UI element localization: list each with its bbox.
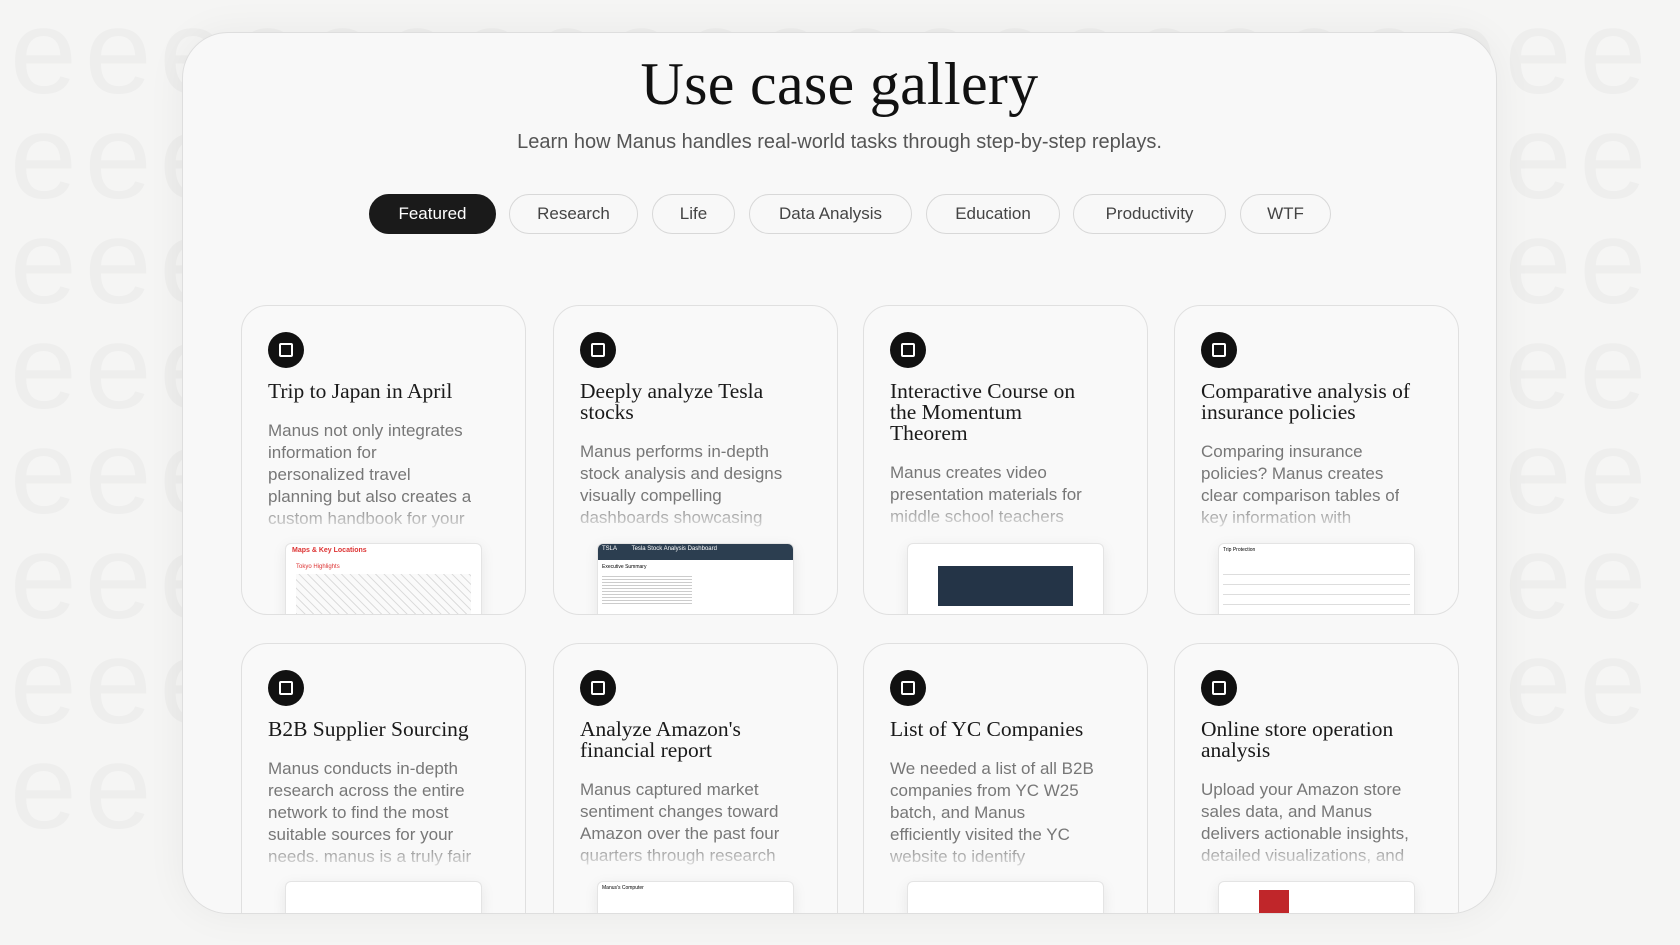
card description: visually compelling: [580, 486, 722, 505]
tab: Education: [926, 194, 1060, 234]
icon: book: [268, 332, 304, 368]
card description: stock analysis and designs: [580, 464, 782, 483]
card title: analysis: [1201, 738, 1270, 762]
card title: the Momentum: [890, 400, 1022, 424]
card description: Manus not only integrates: [268, 421, 463, 440]
card: Insurance: [1174, 305, 1459, 615]
icon: report: [580, 670, 616, 706]
card title: Online store operation: [1201, 717, 1393, 741]
thumbnail: [285, 881, 482, 917]
card description: needs. manus is a truly fair: [268, 847, 471, 866]
thumbnail: dashboard: TSLA Tesla Stock Analysis Dashboard: [602, 546, 717, 552]
card title: [580, 717, 741, 762]
card description: efficiently visited the YC: [890, 825, 1070, 844]
card description: sentiment changes toward: [580, 802, 778, 821]
card description: We needed a list of all B2B: [890, 759, 1094, 778]
icon: chart: [580, 332, 616, 368]
tab: WTF: [1240, 194, 1331, 234]
card title: Analyze Amazon's: [580, 717, 741, 741]
thumbnail: map: Maps & Key Locations: [292, 547, 367, 554]
card title: Deeply analyze Tesla: [580, 379, 763, 403]
card description: network to find the most: [268, 803, 448, 822]
card description: detailed visualizations, and: [1201, 846, 1404, 865]
card description: policies? Manus creates: [1201, 464, 1383, 483]
tab: Featured: Featured: [398, 204, 467, 223]
card title: [580, 379, 763, 424]
thumbnail: dashboard: [597, 543, 794, 623]
card description: website to identify: [890, 847, 1025, 866]
thumbnail: map: Tokyo Highlights: [296, 564, 340, 570]
icon: analytics: [1201, 670, 1237, 706]
card description: [580, 445, 782, 526]
card description: dashboards showcasing: [580, 508, 762, 527]
icon: list: [890, 670, 926, 706]
card title: Trip to Japan in April: [268, 379, 452, 403]
card description: Amazon over the past four: [580, 824, 779, 843]
card description: personalized travel: [268, 465, 411, 484]
card title: stocks: [580, 400, 634, 424]
tab: Productivity: Productivity: [1106, 204, 1193, 223]
card: Trip to Japan: [241, 305, 526, 615]
thumbnail: course: [907, 543, 1104, 623]
card description: presentation materials for: [890, 485, 1082, 504]
thumbnail: table: Trip Protection: [1223, 547, 1255, 553]
card description: sales data, and Manus: [1201, 802, 1372, 821]
icon: course: [890, 332, 926, 368]
card description: Manus performs in-depth: [580, 442, 769, 461]
tab: WTF: WTF: [1267, 204, 1304, 223]
card description: [580, 783, 779, 864]
card description: research across the entire: [268, 781, 465, 800]
card description: [268, 424, 471, 528]
card description: Manus creates video: [890, 463, 1047, 482]
card title: B2B Supplier Sourcing: [268, 717, 469, 741]
card description: information for: [268, 443, 377, 462]
card title: Interactive Course on: [890, 379, 1075, 403]
tab: Education: Education: [955, 204, 1031, 223]
card description: suitable sources for your: [268, 825, 453, 844]
thumbnail: [907, 881, 1104, 917]
card: Tesla: [553, 305, 838, 615]
card description: Upload your Amazon store: [1201, 780, 1401, 799]
card description: clear comparison tables of: [1201, 486, 1399, 505]
card description: delivers actionable insights,: [1201, 824, 1409, 843]
card description: [891, 466, 1082, 522]
card title: [1201, 379, 1410, 424]
card: B2B: [241, 643, 526, 913]
icon: document: [1201, 332, 1237, 368]
card: YC: [863, 643, 1148, 913]
card description: [268, 762, 471, 866]
thumbnail: map: [285, 543, 482, 623]
card title: List of YC Companies: [890, 717, 1083, 741]
card description: custom handbook for your: [268, 509, 465, 528]
thumbnail: Manus's Computer: [602, 885, 644, 891]
card description: quarters through research: [580, 846, 776, 865]
card description: companies from YC W25: [890, 781, 1079, 800]
card: Online store: [1174, 643, 1459, 913]
card description: key information with: [1201, 508, 1351, 527]
card title: Comparative analysis of: [1201, 379, 1410, 403]
thumbnail: [597, 881, 794, 917]
card description: batch, and Manus: [890, 803, 1025, 822]
card title: [1201, 717, 1393, 762]
tab: Data Analysis: Data Analysis: [779, 204, 882, 223]
card title: Theorem: [890, 421, 968, 445]
tab: Productivity: [1073, 194, 1226, 234]
card description: Comparing insurance: [1201, 442, 1363, 461]
tab: Life: Life: [680, 204, 707, 223]
thumbnail: heatmap: [1218, 881, 1415, 917]
card description: [890, 762, 1093, 866]
card title: financial report: [580, 738, 712, 762]
card description: [1202, 783, 1408, 864]
tab: Research: Research: [537, 204, 610, 223]
card description: middle school teachers: [890, 507, 1064, 526]
tab: Data Analysis: [749, 194, 912, 234]
card description: [1202, 445, 1399, 526]
card description: Manus captured market: [580, 780, 759, 799]
thumbnail: dashboard: Executive Summary: [602, 564, 646, 570]
title: Use case gallery: [641, 51, 1038, 117]
subtitle: Learn how Manus handles real-world tasks through step-by-step replays.: [517, 131, 1162, 153]
thumbnail: table: [1218, 543, 1415, 623]
card description: Manus conducts in-depth: [268, 759, 458, 778]
icon: cart: [268, 670, 304, 706]
tab: Featured: [369, 194, 496, 234]
text: eeeeeeeeeeeeeeeeeeeeeeeeeeeeeeeeeeeeeeeeeeeeeeeeeeeeeeeeeeeeeeeeeeeeeeeeeeeeeeeeeeeeeeeeeeeeeeeeeeeeeeeeeeeeeeeeeeeeeeeeeeeeeeeeeeeeeeeeeeeeeeeeeeeeeeeeeeee: [10, 0, 1654, 854]
card title: insurance policies: [1201, 400, 1356, 424]
tab: Research: [509, 194, 638, 234]
card: Amazon: [553, 643, 838, 913]
panel: gallery container: [182, 32, 1497, 914]
card description: planning but also creates a: [268, 487, 471, 506]
tab: Life: [652, 194, 735, 234]
card title: [890, 379, 1075, 445]
card: Momentum: [863, 305, 1148, 615]
